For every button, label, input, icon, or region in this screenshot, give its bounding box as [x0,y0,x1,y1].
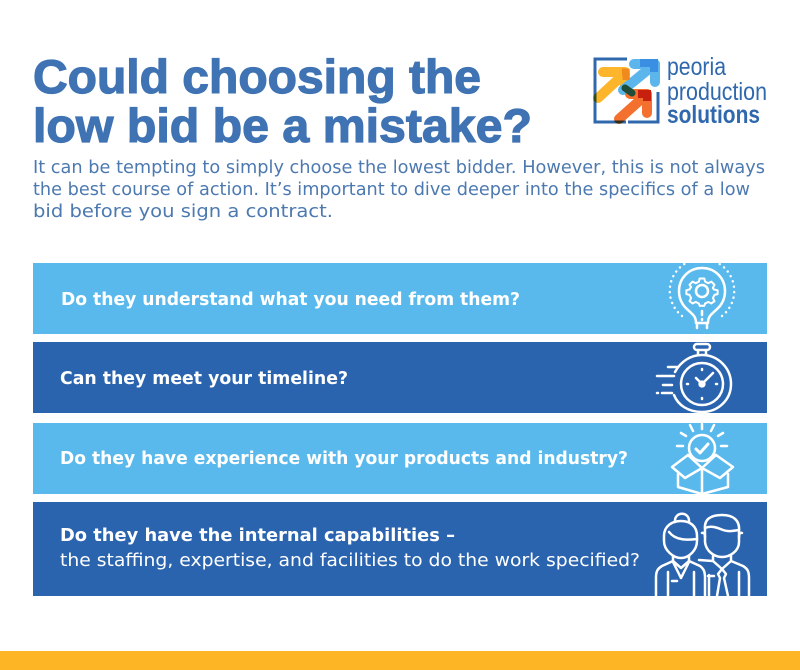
panel: question 1: Do they understand what you need from them? [61,289,520,310]
icon: open box with check [672,424,733,494]
intro paragraph: the best course of action. It’s important to dive deeper into the specifics of a low [33,180,750,200]
logo: peoria production solutions: production [667,78,767,106]
panel: question 4 [33,502,767,596]
logo: peoria production solutions: peoria [667,53,726,81]
panel: question 2 [33,342,767,413]
title: Could choosing the [33,50,481,103]
panel: question 4: the staffing, expertise, and facilities to do the work specified? [60,550,640,571]
panel: question 2: Can they meet your timeline? [60,368,348,389]
panel: question 4: Do they have the internal capabilities – [60,525,455,546]
icon: light bulb with gear [670,263,734,328]
panel: question 3 [33,423,767,494]
title [33,50,532,152]
panel: question 1 [33,263,767,334]
logo: peoria production solutions [595,53,767,129]
intro paragraph: It can be tempting to simply choose the lowest bidder. However, this is not always [33,158,765,178]
footer band [0,651,800,670]
icon: two people [656,514,749,596]
panel: question 3: Do they have experience with your products and industry? [60,448,628,469]
icon: stopwatch [657,344,731,412]
logo: peoria production solutions: solutions [667,101,760,129]
intro paragraph: bid before you sign a contract. [33,202,333,222]
title: low bid be a mistake? [33,99,532,152]
intro paragraph [33,158,765,222]
